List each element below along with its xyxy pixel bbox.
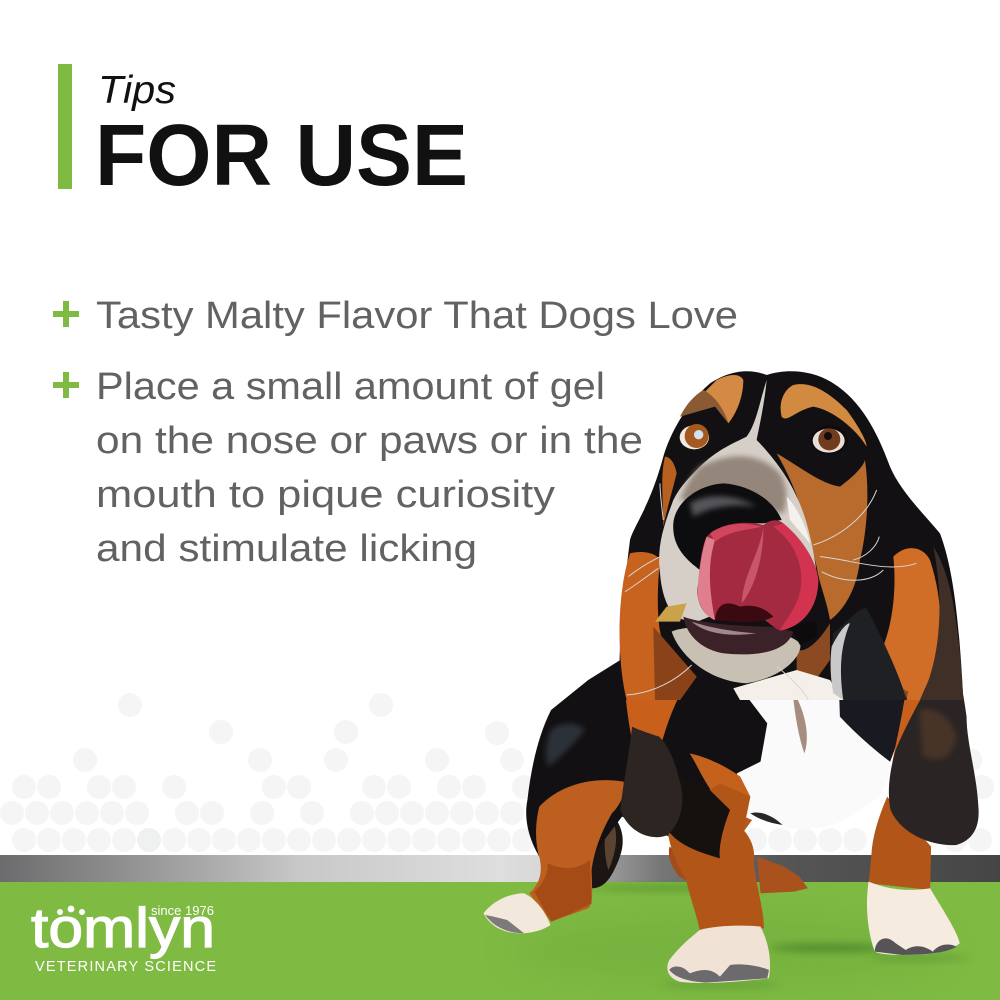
eyes <box>678 423 848 455</box>
title: FOR USE <box>95 107 468 204</box>
gradient band <box>0 855 1000 882</box>
ears orange <box>620 552 697 700</box>
lower lip <box>683 617 793 654</box>
logo: VETERINARY SCIENCE <box>35 959 216 975</box>
green floor <box>0 882 1000 1000</box>
bullet 2: mouth to pique curiosity <box>96 474 555 516</box>
logo: tomlyn <box>31 896 215 959</box>
bullet 1: Tasty Malty Flavor That Dogs Love <box>96 295 738 337</box>
background dots pattern <box>0 693 994 852</box>
logo: since 1976 <box>151 904 214 918</box>
dog body and legs <box>484 650 979 983</box>
tongue <box>697 520 818 631</box>
bullet 2 <box>53 366 643 570</box>
brows <box>703 375 743 423</box>
chin fur <box>672 626 800 683</box>
nose <box>673 483 782 570</box>
basset hound illustration <box>484 371 979 983</box>
whiskers <box>625 483 917 700</box>
white blaze and muzzle <box>659 380 817 623</box>
title accent bar <box>58 64 72 189</box>
title: Tips <box>98 69 176 112</box>
bullet 2: and stimulate licking <box>96 528 477 570</box>
head silhouette <box>619 371 963 700</box>
bullet 2: Place a small amount of gel <box>96 366 605 408</box>
right ear <box>879 650 979 845</box>
dog head <box>619 371 963 700</box>
cheek orange <box>777 453 867 620</box>
bullet 2: on the nose or paws or in the <box>96 420 643 462</box>
left ear <box>620 650 696 837</box>
neck <box>797 623 830 683</box>
floor shadows <box>510 885 970 990</box>
